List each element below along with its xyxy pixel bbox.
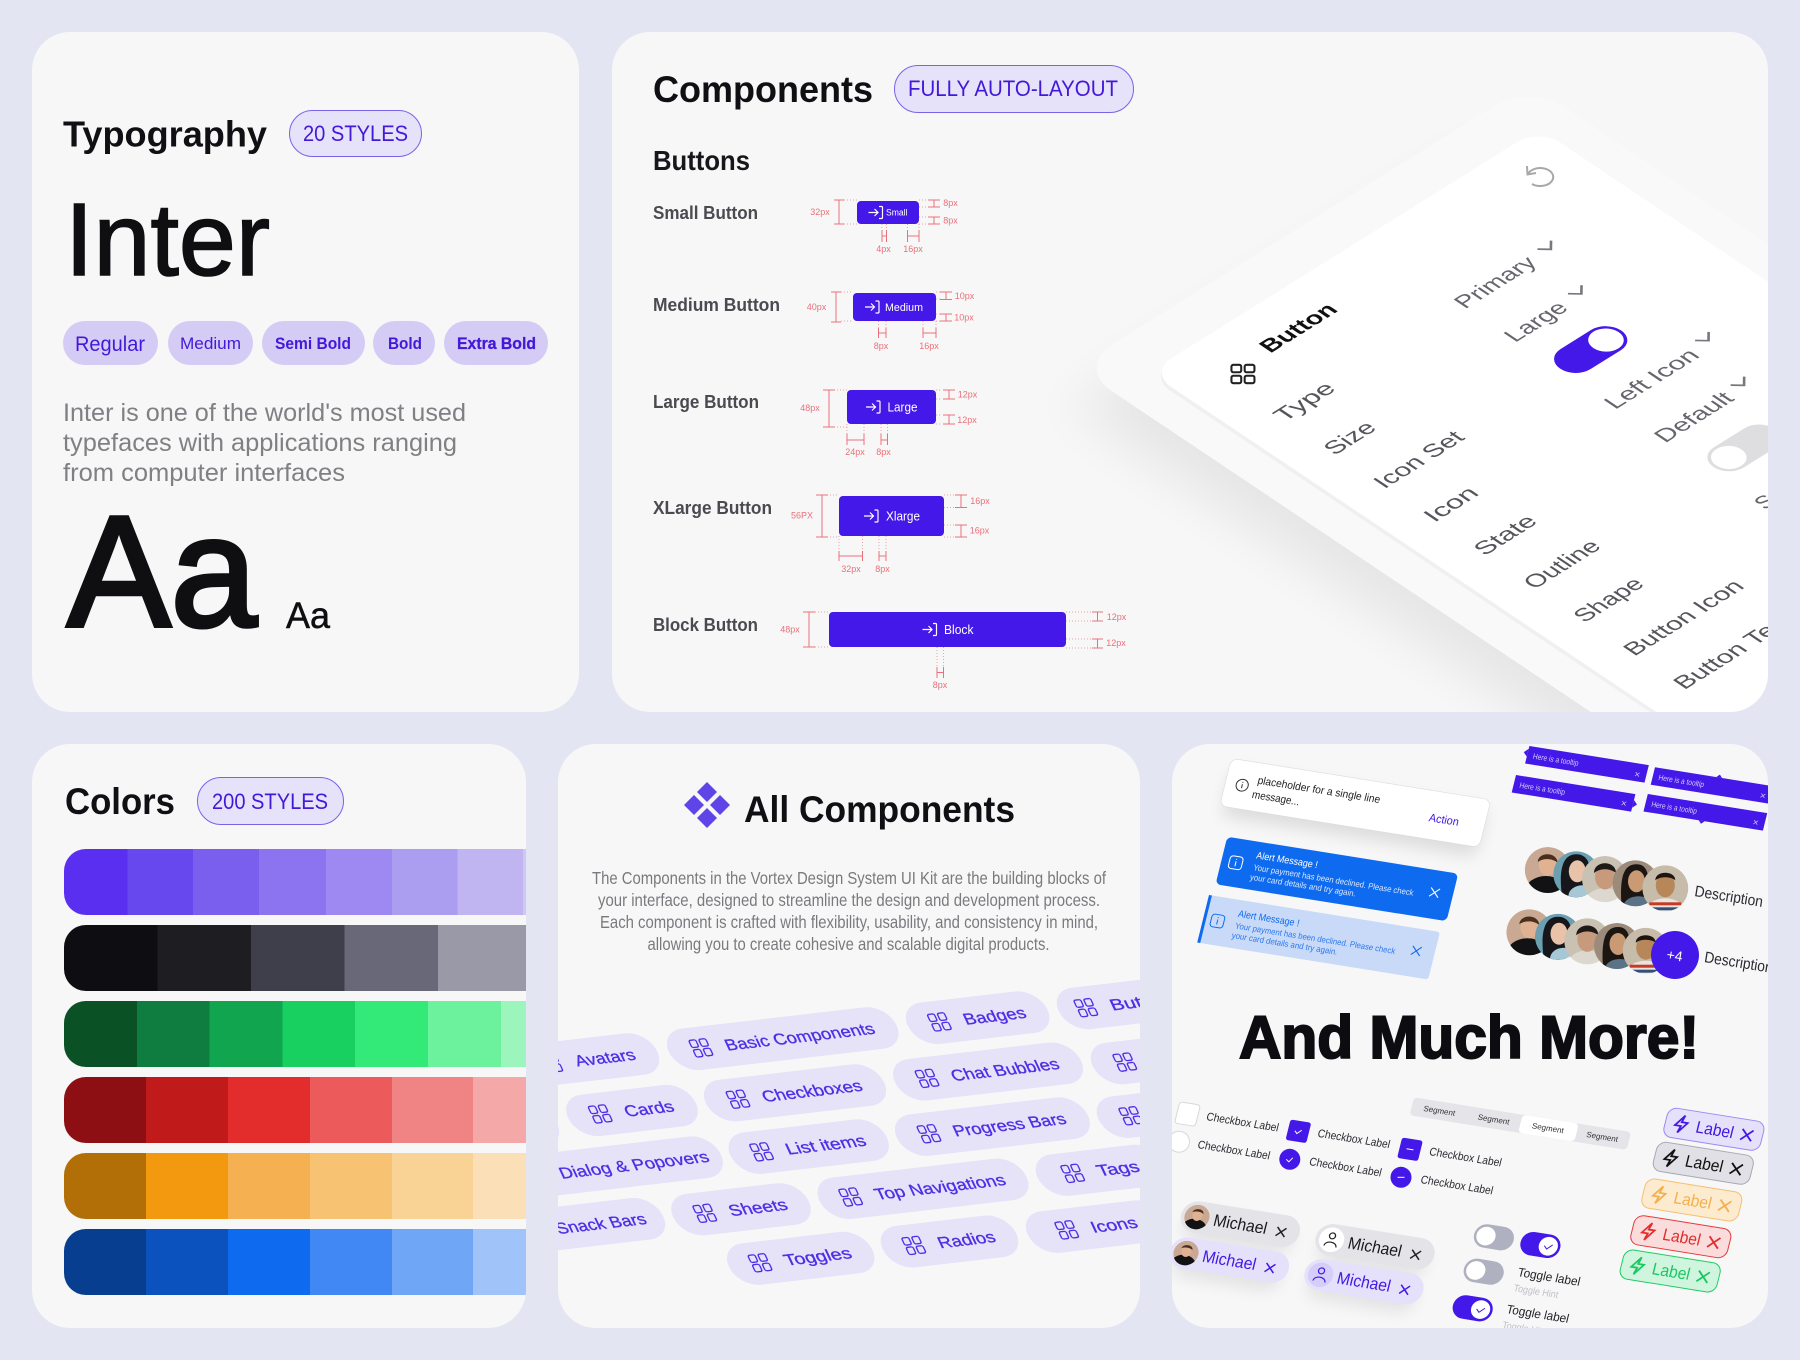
weight pills: Semi Bold: [275, 334, 351, 353]
toggle: off: [1471, 1222, 1517, 1252]
tilted button properties mockup: Size: [1317, 417, 1382, 459]
pill: sheets: Sheets: [725, 1196, 791, 1220]
pill: radios: [880, 1216, 1018, 1268]
row: small button: Small Button: [653, 203, 758, 223]
pill: basic components: Basic Components: [721, 1020, 878, 1054]
segmented control: Segment: [1531, 1121, 1566, 1135]
alert: light blue: [1197, 895, 1440, 980]
pill: tags: Tags: [1093, 1158, 1143, 1180]
row: medium button: 16px: [919, 341, 939, 351]
avatar group 2 with +4: Description: [1703, 949, 1774, 977]
row: small button: 8px: [943, 216, 958, 226]
row: xlarge button: 8px: [875, 564, 890, 574]
pill: checkboxes: Checkboxes: [759, 1077, 866, 1106]
tooltip: right notch: [1512, 775, 1639, 812]
pill: checkboxes: [704, 1064, 886, 1122]
row: block button: [653, 612, 1127, 690]
tilted button properties mockup: [1102, 166, 1768, 712]
avatar group 2 with +4: [1506, 909, 1774, 989]
pill: icons: Icons: [1087, 1214, 1141, 1236]
tag: purple: Label: [1694, 1118, 1736, 1142]
panel: and much more: [1164, 744, 1775, 1338]
pill: dialog and popovers: [558, 1136, 723, 1196]
toggle: off with label: [1461, 1257, 1582, 1301]
pill: radios: Radios: [934, 1228, 999, 1252]
tilted component pills: [558, 980, 1140, 1285]
pill: progress bars: [895, 1097, 1090, 1156]
row: block button: 8px: [933, 680, 948, 690]
description text: from computer interfaces: [63, 459, 345, 487]
paragraph: your interface, designed to streamline the design and development process.: [598, 890, 1100, 910]
row: block button: 12px: [1107, 612, 1127, 622]
subheading: Buttons: Buttons: [653, 145, 750, 176]
tilted button properties mockup: Button Text: [1667, 609, 1800, 693]
row: xlarge button: 16px: [970, 526, 990, 536]
pill: clipped right: [1090, 1038, 1140, 1084]
tilted button properties mockup: State: [1467, 511, 1543, 559]
chip: Michael gray icon: Michael: [1346, 1234, 1404, 1261]
alert: solid blue: [1216, 837, 1458, 921]
pill: chat bubbles: [893, 1042, 1083, 1100]
row: block button: Block: [944, 623, 974, 637]
row: large button: Large Button: [653, 392, 759, 412]
chip: Michael purple photo: [1164, 1235, 1292, 1294]
segmented control: Segment: [1585, 1130, 1620, 1144]
weight pills: Bold: [388, 334, 422, 353]
swatch row: blue: [64, 1229, 528, 1295]
pill: clipped left: [558, 1126, 560, 1138]
row: large button: 12px: [957, 415, 977, 425]
row: large button: Large: [888, 400, 918, 414]
weight pills: [63, 321, 548, 365]
pill: top navigations: Top Navigations: [871, 1171, 1009, 1203]
tilted button properties mockup: Large: [1498, 297, 1574, 346]
row: block button: Block Button: [653, 615, 758, 635]
paragraph: Each component is crafted with flexibility, usability, and consistency in mind,: [600, 912, 1098, 932]
row: small button: Small: [886, 208, 908, 218]
pill: basic components: [667, 1007, 898, 1070]
pill: toggles: [727, 1232, 874, 1285]
panel: typography: [32, 32, 579, 712]
tilted button properties mockup: Icon Set: [1367, 426, 1471, 492]
alert: solid blue: Alert Message !: [1255, 851, 1319, 871]
badge: 20 styles: [290, 110, 422, 156]
alert: light blue: your card details and try again.: [1231, 930, 1339, 957]
pill: cards: [566, 1085, 698, 1136]
chip: Michael gray photo: Michael: [1211, 1211, 1269, 1238]
toggle: off with label: Toggle Hint: [1512, 1283, 1560, 1301]
pill: top navigations: [818, 1158, 1028, 1219]
row: block button: 48px: [780, 624, 800, 634]
row: xlarge button: [653, 495, 990, 574]
pill: dialog and popovers: Dialog & Popovers: [556, 1148, 712, 1182]
tooltip: right notch: Here is a tooltip: [1519, 781, 1567, 797]
tooltip: top notch: Here is a tooltip: [1658, 773, 1706, 789]
row: medium button: [653, 291, 975, 351]
weight pills: Regular: [75, 333, 145, 356]
snackbar message: Action: [1428, 812, 1460, 829]
row: small button: 16px: [903, 244, 923, 254]
tilted button properties mockup: Button: [1253, 299, 1343, 356]
snackbar message: message...: [1251, 789, 1301, 808]
tilted button properties mockup: Outline: [1517, 536, 1606, 592]
swatch row: neutral: [64, 925, 528, 991]
pill: tags: [1036, 1144, 1140, 1196]
chip: Michael purple photo: Michael: [1200, 1247, 1258, 1274]
checkboxes: [1168, 1102, 1503, 1197]
segmented control: Segment: [1477, 1113, 1511, 1127]
row: medium button: 8px: [874, 341, 889, 351]
row: large button: 24px: [845, 447, 865, 457]
tag: orange: [1640, 1178, 1744, 1222]
tilted button properties mockup: Icon: [1417, 482, 1484, 526]
pill: cards: Cards: [621, 1098, 677, 1120]
alert: solid blue: Your payment has been declined. Please check: [1252, 862, 1415, 898]
row: xlarge button: 32px: [841, 564, 861, 574]
paragraph: allowing you to create cohesive and scalable digital products.: [648, 934, 1050, 954]
alert: light blue: Your payment has been declined. Please check: [1234, 921, 1397, 956]
toggle: off with label: Toggle label: [1516, 1265, 1582, 1289]
heading: And Much More: And Much More!: [1239, 1004, 1699, 1071]
paragraph: [592, 868, 1106, 954]
alert: light blue: Alert Message !: [1237, 909, 1301, 929]
row: small button: [653, 198, 958, 254]
checkboxes: Checkbox Label: [1428, 1146, 1503, 1169]
row: xlarge button: 56PX: [791, 510, 813, 520]
tag: red: Label: [1661, 1225, 1703, 1250]
description text: Inter is one of the world's most used: [63, 399, 466, 427]
pill: avatars: [558, 1033, 660, 1085]
heading: All Components: All Components: [744, 789, 1015, 830]
snackbar message: [1217, 758, 1491, 857]
row: large button: 8px: [876, 447, 891, 457]
avatar group 1: Description: [1693, 883, 1764, 911]
panel: all components: [558, 744, 1140, 1328]
row: medium button: 40px: [807, 302, 827, 312]
avatar group 1: [1525, 847, 1764, 926]
tooltip: top notch: [1650, 767, 1768, 804]
pill: clipped right 2: [1096, 1093, 1140, 1138]
chip: Michael purple icon: [1299, 1257, 1427, 1315]
heading: Components: Components: [653, 69, 873, 110]
weight pills: Extra Bold: [457, 334, 536, 353]
weight pills: Medium: [180, 334, 241, 353]
row: large button: 48px: [800, 403, 820, 413]
checkboxes: Checkbox Label: [1419, 1174, 1494, 1197]
toggle: on with label: Toggle Hint: [1501, 1320, 1548, 1338]
avatar group 2 with +4: +4: [1666, 946, 1684, 965]
chip: Michael purple icon: Michael: [1335, 1269, 1393, 1296]
row: large button: 12px: [958, 390, 978, 400]
tag: gray: Label: [1683, 1152, 1725, 1176]
tag: gray: [1651, 1141, 1755, 1186]
tilted button properties mockup: Shape: [1567, 573, 1650, 626]
color swatches: [64, 849, 533, 1295]
row: small button: 4px: [876, 244, 891, 254]
pill: list items: [728, 1119, 889, 1174]
tilted button properties mockup: Button Icon: [1617, 576, 1750, 659]
icon: four diamonds logo: [684, 782, 730, 828]
segmented control: Segment: [1422, 1104, 1457, 1118]
badge: 200 styles: [198, 778, 344, 824]
row: medium button: 10px: [954, 312, 974, 322]
tag: purple: [1662, 1107, 1766, 1152]
row: medium button: Medium Button: [653, 295, 780, 315]
row: medium button: 10px: [955, 291, 975, 301]
toggle: on: [1518, 1230, 1563, 1260]
pill: sheets: [671, 1183, 811, 1236]
pill: toggles: Toggles: [781, 1244, 855, 1269]
pill: avatars: Avatars: [571, 1046, 639, 1070]
pill: chat bubbles: Chat Bubbles: [948, 1055, 1062, 1085]
swatch row: red: [64, 1077, 528, 1143]
pill: progress bars: Progress Bars: [949, 1110, 1069, 1140]
swatch row: purple: [64, 849, 533, 915]
pill: snack bars: Snack Bars: [552, 1210, 650, 1238]
tilted button properties mockup: Left Icon: [1598, 345, 1705, 413]
panel: colors: [32, 744, 533, 1328]
toggle: on with label: Toggle label: [1505, 1302, 1571, 1326]
pill: badges: Badges: [960, 1004, 1029, 1028]
toggle: on with label: [1450, 1294, 1571, 1338]
paragraph: The Components in the Vortex Design System UI Kit are the building blocks of: [592, 868, 1106, 888]
tilted button properties mockup: Primary: [1448, 252, 1543, 312]
checkboxes: Checkbox Label: [1196, 1139, 1271, 1162]
pill: list items: List items: [782, 1132, 869, 1158]
description text: [63, 399, 466, 487]
checkboxes: Checkbox Label: [1205, 1111, 1280, 1134]
row: large button: [653, 390, 978, 457]
badge: 20 styles: 20 STYLES: [303, 121, 408, 146]
row: xlarge button: XLarge Button: [653, 498, 772, 518]
row: small button: 32px: [810, 207, 830, 217]
snackbar message: placeholder for a single line: [1256, 775, 1382, 806]
segmented control: [1410, 1097, 1631, 1150]
tooltip: bottom notch: Here is a tooltip: [1650, 800, 1698, 816]
row: medium button: Medium: [885, 302, 923, 314]
pill: icons: [1026, 1200, 1140, 1253]
swatch row: green: [64, 1001, 528, 1067]
tilted button properties mockup: Default: [1648, 387, 1740, 446]
tooltip: left notch: [1521, 745, 1649, 783]
row: xlarge button: 16px: [970, 496, 990, 506]
specimen: Inter: Inter: [65, 182, 270, 297]
tag: green: [1618, 1249, 1722, 1293]
row: block button: 12px: [1106, 638, 1126, 648]
panel: components: [612, 32, 1768, 712]
badge: 200 styles: 200 STYLES: [212, 789, 328, 814]
pill: badges: [906, 992, 1050, 1044]
specimen: small Aa: Aa: [286, 595, 330, 636]
tag: green: Label: [1650, 1259, 1692, 1284]
pill: buttons: [1056, 980, 1140, 1030]
tilted button properties mockup: Type: [1267, 378, 1341, 425]
chip: Michael gray icon: [1310, 1222, 1438, 1280]
pill: snack bars: [558, 1198, 665, 1250]
alert: solid blue: your card details and try again.: [1249, 872, 1357, 898]
badge: fully auto-layout: FULLY AUTO-LAYOUT: [908, 76, 1118, 101]
specimen: large Aa: Aa: [67, 484, 257, 660]
row: small button: 8px: [943, 198, 958, 208]
tooltip: left notch: Here is a tooltip: [1532, 752, 1580, 768]
checkboxes: Checkbox Label: [1308, 1156, 1383, 1179]
badge: fully auto-layout: [894, 66, 1134, 112]
heading: Colors: Colors: [65, 781, 175, 822]
checkboxes: Checkbox Label: [1316, 1128, 1391, 1151]
tag: orange: Label: [1672, 1188, 1714, 1213]
row: xlarge button: Xlarge: [886, 510, 920, 524]
tag: red: [1629, 1214, 1733, 1259]
chip: Michael gray photo: [1175, 1199, 1303, 1258]
tooltip: bottom notch: [1643, 794, 1767, 833]
swatch row: orange: [64, 1153, 528, 1219]
heading: Typography: Typography: [63, 114, 267, 154]
description text: typefaces with applications ranging: [63, 429, 457, 457]
pill: buttons: Buttons: [1106, 989, 1184, 1014]
